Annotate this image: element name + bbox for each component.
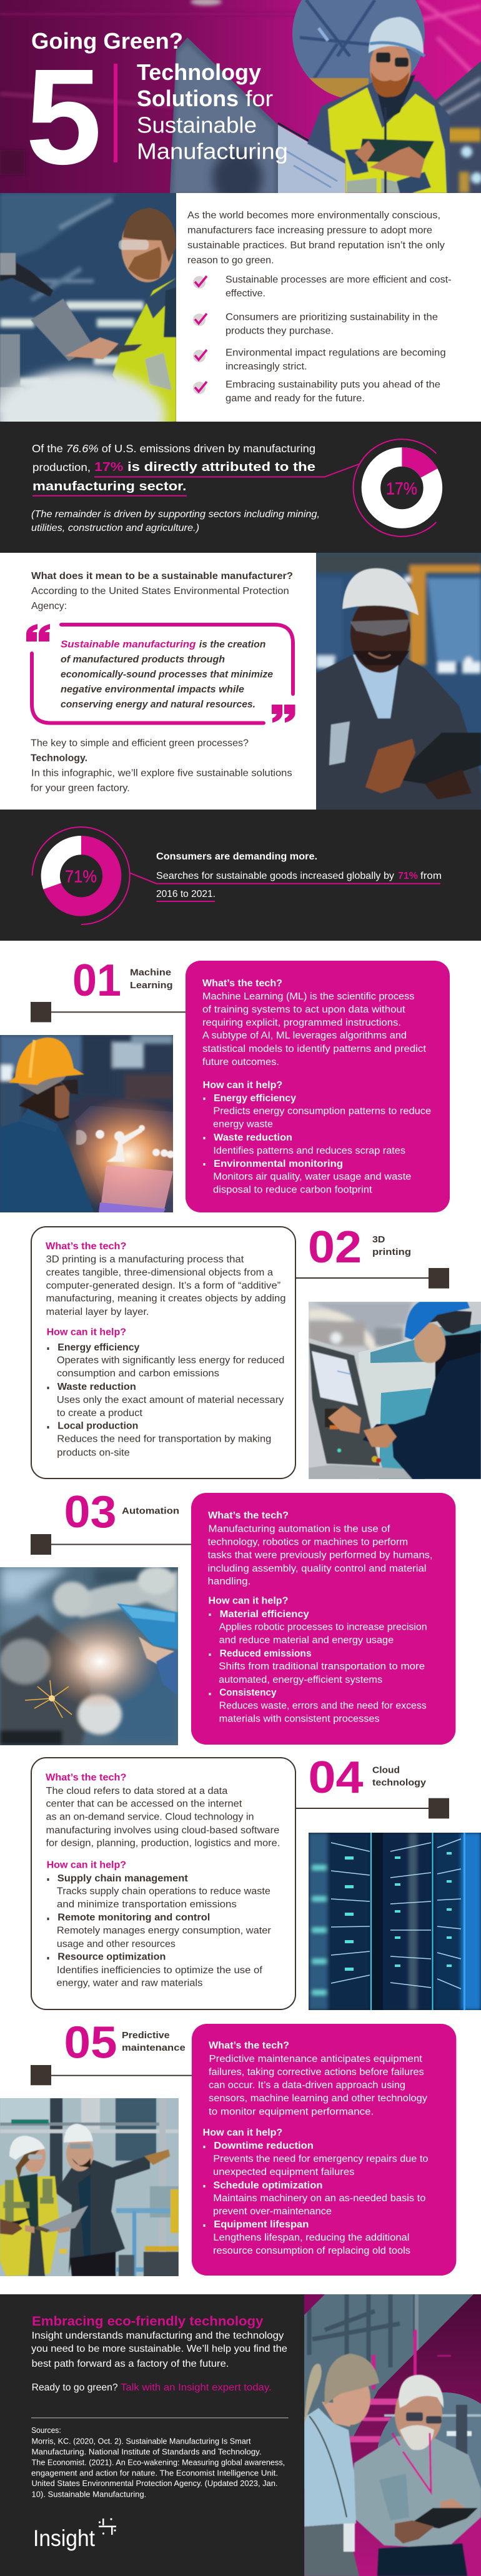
label: Predictive maintenance: maintenance	[122, 2043, 186, 2053]
panel: 3D printing description: Uses only the exact amount of material necessary	[57, 1395, 284, 1405]
panel: automation description: Shifts from traditional transportation to more	[219, 1662, 425, 1672]
call to action	[32, 2382, 272, 2393]
connector	[31, 2065, 192, 2085]
sources: engagement and action for nature. The Economist Intelligence Unit.	[31, 2469, 278, 2477]
definition closing text: In this infographic, we’ll explore five sustainable solutions	[31, 768, 292, 779]
grey factory wedge right	[432, 61, 481, 193]
section 04: cloud technology	[31, 1753, 481, 2010]
label: 3D printing: 3D	[372, 1234, 385, 1245]
heading: embracing eco-friendly technology: Embracing eco-friendly technology	[32, 2314, 264, 2329]
definition closing text: for your green factory.	[31, 783, 130, 794]
consumer text	[156, 851, 442, 899]
checklist item 3: increasingly strict.	[226, 361, 307, 372]
logo: Insight: Insight	[33, 2525, 96, 2551]
face	[369, 45, 412, 86]
panel: automation description: Consistency	[219, 1688, 277, 1698]
panel: cloud description: Tracks supply chain operations to reduce waste	[57, 1886, 270, 1896]
checklist item 3: Environmental impact regulations are becoming	[226, 347, 446, 358]
quote text: conserving energy and natural resources.	[61, 700, 255, 710]
panel: cloud description: The cloud refers to data stored at a data	[46, 1786, 228, 1796]
label: Machine Learning: Machine	[130, 967, 171, 978]
panel: predictive maintenance description: Lengthens lifespan, reducing the additional	[213, 2232, 409, 2243]
panel: machine learning description: Machine Learning (ML) is the scientific process	[202, 991, 415, 1002]
panel: predictive maintenance description: Equipment lifespan	[214, 2219, 309, 2230]
laptop	[31, 299, 142, 361]
panel: 3D printing description: Energy efficiency	[57, 1342, 140, 1353]
definition closing text: The key to simple and efficient green processes?	[31, 738, 249, 749]
label: Predictive maintenance: Predictive	[122, 2030, 170, 2041]
sources: The Economist. (2021). An Eco-wakening: Measuring global awareness,	[31, 2458, 285, 2467]
emissions text: manufacturing sector.	[32, 479, 187, 493]
panel: predictive maintenance description: Prevents the need for emergency repairs due to	[213, 2154, 428, 2164]
label: Machine Learning: Learning	[130, 980, 172, 991]
intro paragraph: reason to go green.	[187, 255, 274, 266]
callout line from donut	[130, 873, 440, 901]
panel: machine learning description: energy waste	[213, 1119, 273, 1130]
label: Machine Learning	[130, 967, 172, 991]
panel: 3D printing description: to create a product	[57, 1408, 143, 1419]
connector	[31, 1002, 186, 1022]
panel: automation description: Manufacturing automation is the use of	[209, 1524, 390, 1535]
panel: automation description: What’s the tech?	[208, 1510, 289, 1521]
panel: predictive maintenance description: Maintains machinery on an as-needed basis to	[213, 2193, 425, 2204]
checklist item 2	[193, 312, 438, 336]
definition closing text: Technology.	[31, 753, 87, 764]
panel: 3D printing description: How can it help?	[47, 1327, 126, 1338]
panel: automation description: Material efficiency	[220, 1609, 309, 1620]
panel: machine learning description: Identifies patterns and reduces scrap rates	[213, 1146, 405, 1156]
intro paragraph: As the world becomes more environmentally conscious,	[187, 210, 440, 221]
number 04: 04	[309, 1753, 364, 1803]
panel: predictive maintenance description	[192, 2024, 456, 2276]
photo: operator at control panel	[309, 1302, 481, 1479]
panel: cloud description: How can it help?	[47, 1860, 126, 1871]
panel: predictive maintenance description: prevent over-maintenance	[213, 2206, 332, 2217]
panel: intro text	[187, 210, 451, 404]
definition closing text	[31, 738, 292, 794]
panel: 3D printing description: What’s the tech?	[46, 1241, 126, 1252]
panel: 3D printing description: 3D printing is a manufacturing process that	[46, 1254, 244, 1265]
donut chart: 17%	[354, 439, 437, 537]
number 05: 05	[64, 2018, 117, 2068]
panel: 3D printing description: material layer by layer.	[46, 1307, 149, 1317]
label: Cloud technology	[372, 1765, 427, 1788]
panel: automation description: technology, robotics or machines to perform	[207, 1537, 408, 1547]
panel: emissions stat band	[0, 422, 481, 553]
heading: technology solutions: Sustainable	[137, 112, 257, 137]
panel: predictive maintenance description: failures, taking corrective actions before failures	[209, 2067, 424, 2078]
panel: automation description: and reduce material and energy usage	[219, 1635, 394, 1646]
panel: 3D printing description: computer-generated design. It’s a form of “additive”	[46, 1281, 280, 1291]
donut chart: 17%: 17%	[386, 479, 417, 498]
panel: cloud description: Supply chain management	[57, 1873, 188, 1884]
panel: machine learning description	[186, 961, 450, 1212]
helmet	[369, 17, 424, 56]
panel: predictive maintenance description: to monitor equipment performance.	[209, 2106, 374, 2117]
panel: machine learning description: What’s the tech?	[202, 978, 282, 989]
panel: 3D printing description: Reduces the need for transportation by making	[57, 1434, 271, 1445]
closing paragraph: you need to be more sustainable. We’ll help you find the	[31, 2344, 287, 2354]
icon: closing quote	[272, 705, 295, 723]
definition intro: Agency:	[31, 601, 67, 612]
photo: worker in white helmet with tablet	[316, 553, 481, 810]
consumer text: 2016 to 2021.	[156, 889, 216, 899]
panel: 3D printing description: Waste reduction	[57, 1382, 136, 1392]
sources: 10). Sustainable Manufacturing.	[31, 2490, 146, 2499]
connector	[295, 1798, 449, 1818]
photo: engineer with laptop and robot arm	[0, 193, 176, 422]
call to action: Talk with an Insight expert today.	[121, 2382, 272, 2393]
consumer text: 71%	[398, 871, 418, 881]
panel: predictive maintenance description: Downtime reduction	[214, 2141, 314, 2151]
panel: cloud description: manufacturing involves using cloud-based software	[46, 1825, 279, 1836]
panel: cloud description: Remote monitoring and control	[57, 1912, 210, 1923]
panel: 3D printing description: consumption and carbon emissions	[57, 1369, 219, 1379]
consumer text: Consumers are demanding more.	[156, 851, 317, 862]
panel: predictive maintenance description: Schedule optimization	[213, 2180, 322, 2191]
steel blue circle	[292, 0, 425, 97]
panel: machine learning description: Predicts energy consumption patterns to reduce	[213, 1106, 431, 1117]
emissions text: Of the 76.6% of U.S. emissions driven by manufacturing	[32, 442, 315, 455]
label: 3D printing	[372, 1234, 411, 1257]
icon: opening quote	[26, 624, 50, 642]
monitors	[170, 37, 278, 193]
definition intro: What does it mean to be a sustainable manufacturer?	[31, 571, 293, 582]
quote text: Sustainable manufacturing	[61, 640, 196, 650]
intro paragraph: sustainable practices. But brand reputation isn’t the only	[187, 240, 445, 251]
panel: closing footer	[0, 2294, 481, 2576]
panel: machine learning description: requiring explicit, programmed instructions.	[202, 1018, 401, 1028]
logo: Insight	[33, 2518, 116, 2551]
panel: predictive maintenance description: can occur. It’s a data-driven approach using	[209, 2080, 405, 2091]
number 03: 03	[64, 1487, 116, 1537]
panel: machine learning description: Waste reduction	[214, 1132, 292, 1143]
panel: predictive maintenance description: What’s the tech?	[209, 2040, 289, 2051]
heading: Going Green?: Going Green?	[31, 28, 183, 54]
quote text: negative environmental impacts while	[61, 685, 244, 695]
callout line to donut	[32, 464, 359, 496]
panel: 3D printing description	[31, 1227, 295, 1479]
panel: consumer demand stat band	[0, 810, 481, 941]
section 01: machine learning	[0, 956, 450, 1215]
photo: robotic arm, sparks and tablet	[0, 1567, 178, 1745]
sources: Morris, KC. (2020, Oct. 2). Sustainable Manufacturing Is Smart	[31, 2437, 251, 2446]
panel: cloud description: and minimize transportation emissions	[57, 1900, 237, 1910]
section 05: predictive maintenance	[0, 2018, 456, 2277]
closing paragraph: Insight understands manufacturing and the technology	[32, 2331, 284, 2341]
checklist item 4	[193, 380, 440, 404]
panel: predictive maintenance description: resource consumption of replacing old tools	[213, 2246, 410, 2256]
photo: helmet worker with holographic screen	[0, 1035, 173, 1212]
emissions text	[31, 442, 320, 533]
panel: predictive maintenance description: How can it help?	[203, 2128, 282, 2138]
definition intro	[31, 571, 293, 612]
panel: machine learning description: Monitors air quality, water usage and waste	[213, 1172, 411, 1182]
number 01: 01	[72, 956, 121, 1006]
quote text: is the creation	[199, 640, 266, 650]
panel: machine learning description: of training systems to act upon data without	[202, 1004, 405, 1015]
operator	[362, 1330, 481, 1479]
panel: cloud description: for design, planning, production, logistics and more.	[46, 1838, 280, 1849]
engineer	[112, 278, 176, 425]
heading: technology solutions: for	[245, 86, 273, 111]
panel: cloud description: center that can be accessed on the internet	[46, 1798, 242, 1809]
consumer text: Searches for sustainable goods increased globally by	[156, 871, 394, 881]
emissions text: is directly attributed to the	[127, 460, 315, 474]
photo: two engineers with tablet	[304, 2294, 481, 2576]
panel: machine learning description: How can it help?	[203, 1080, 282, 1091]
panel: automation description: How can it help?	[209, 1595, 289, 1607]
consumer text: from	[420, 871, 442, 881]
connector	[31, 1534, 191, 1555]
emissions text: 17%	[94, 460, 123, 474]
label: Cloud technology: Cloud	[372, 1765, 400, 1775]
panel: 3D printing description: manufacturing, meaning it creates objects by adding	[46, 1294, 286, 1304]
quote text	[61, 640, 273, 710]
quote text: economically-sound processes that minimize	[61, 670, 273, 680]
panel: automation description: Reduced emissions	[220, 1648, 312, 1659]
panel: definition text	[26, 571, 295, 794]
laptop and tablet	[34, 2206, 88, 2232]
panel: automation description: handling.	[207, 1577, 250, 1587]
panel: automation description	[191, 1493, 455, 1745]
arms/tablet	[345, 149, 369, 175]
panel: machine learning description: A subtype of AI, ML leverages algorithms and	[202, 1031, 407, 1041]
intro paragraph: manufacturers face increasing pressure to adopt more	[187, 225, 432, 236]
heading: technology solutions: Technology	[137, 59, 261, 85]
panel: predictive maintenance description: unexpected equipment failures	[213, 2167, 355, 2177]
sources: United States Environmental Protection Agency. (Updated 2023, Jan.	[31, 2479, 277, 2488]
panel: machine learning description: statistical models to identify patterns and predict	[202, 1044, 427, 1054]
heading: technology solutions: Solutions	[137, 86, 239, 111]
big number 5: 5	[26, 41, 102, 193]
donut chart: 71%: 71%	[65, 867, 97, 886]
panel: automation description: automated, energy-efficient systems	[219, 1675, 382, 1685]
closing paragraph: best path forward as a factory of the future.	[32, 2359, 229, 2369]
worker body	[307, 17, 450, 193]
photo: hero worker with tablet over magenta factory	[0, 0, 481, 206]
emissions text: (The remainder is driven by supporting sectors including mining,	[31, 509, 320, 520]
panel: automation description: Applies robotic processes to increase precision	[219, 1622, 427, 1632]
heading: technology solutions: Manufacturing	[137, 139, 288, 164]
panel: predictive maintenance description: sensors, machine learning and other technology	[209, 2093, 427, 2104]
title block	[26, 28, 288, 193]
donut chart: 71%	[32, 827, 130, 924]
checklist item 2: products they purchase.	[226, 325, 334, 336]
heading: technology solutions	[137, 59, 288, 164]
quote frame	[32, 625, 293, 723]
panel: automation description: materials with consistent processes	[219, 1713, 380, 1724]
checklist item 4: game and ready for the future.	[226, 394, 365, 404]
panel: cloud description: What’s the tech?	[46, 1773, 126, 1783]
panel: machine learning description: future outcomes.	[202, 1057, 279, 1068]
panel: automation description: tasks that were previously performed by humans,	[207, 1550, 432, 1561]
checklist item 1	[193, 275, 451, 299]
connector	[295, 1268, 449, 1289]
call to action: Ready to go green?	[32, 2382, 118, 2393]
label: 3D printing: printing	[372, 1247, 411, 1257]
sources: Manufacturing. National Institute of Standards and Technology.	[31, 2447, 262, 2456]
quote text: of manufactured products through	[61, 655, 225, 665]
panel: automation description: including assembly, quality control and material	[207, 1563, 426, 1574]
label: Predictive maintenance	[122, 2030, 186, 2053]
panel: 3D printing description: products on-site	[57, 1447, 130, 1458]
panel: machine learning description: Energy efficiency	[214, 1093, 296, 1104]
man	[350, 2436, 481, 2549]
woman	[304, 2408, 356, 2527]
checklist item 1: effective.	[226, 288, 265, 299]
emissions text: production,	[32, 461, 91, 473]
panel: cloud description	[31, 1758, 295, 2009]
robot arm	[0, 262, 54, 297]
panel: predictive maintenance description: Predictive maintenance anticipates equipment	[209, 2054, 423, 2064]
panel: cloud description: Identifies inefficiencies to optimize the use of	[57, 1965, 263, 1976]
panel: 3D printing description: Local production	[57, 1421, 138, 1432]
definition intro: According to the United States Environmental Protection	[31, 586, 289, 597]
photo: data center server racks	[309, 1833, 481, 2010]
panel: 3D printing description: Operates with significantly less energy for reduced	[57, 1355, 284, 1366]
panel: cloud description: energy, water and raw materials	[56, 1978, 203, 1988]
label: Automation: Automation	[122, 1505, 179, 1516]
panel: machine learning description: Environmental monitoring	[214, 1159, 343, 1169]
photo: engineers pointing in factory	[0, 2098, 179, 2277]
checklist item 3	[193, 347, 446, 372]
panel: cloud description: usage and other resources	[57, 1939, 176, 1949]
panel: automation description: Reduces waste, errors and the need for excess	[219, 1701, 427, 1712]
checklist item 4: Embracing sustainability puts you ahead of the	[226, 380, 440, 390]
label: Cloud technology: technology	[372, 1778, 427, 1788]
number 02: 02	[308, 1222, 362, 1272]
intro paragraph	[187, 210, 445, 266]
sources: Sources:	[31, 2426, 61, 2435]
section 03: automation	[0, 1487, 455, 1745]
section 02: 3D printing	[31, 1222, 481, 1479]
panel: machine learning description: disposal to reduce carbon footprint	[213, 1185, 372, 1196]
title divider	[114, 64, 117, 162]
panel: 3D printing description: creates tangible, three-dimensional objects from a	[46, 1267, 273, 1278]
emissions text: utilities, construction and agriculture.)	[31, 523, 199, 533]
sources	[31, 2426, 285, 2499]
woman	[0, 2176, 59, 2276]
panel: cloud description: as an on-demand service. Cloud technology in	[46, 1812, 254, 1823]
checklist item 2: Consumers are prioritizing sustainability in the	[226, 312, 438, 323]
man	[55, 2155, 150, 2274]
panel: cloud description: Remotely manages energy consumption, water	[57, 1926, 271, 1936]
checklist item 1: Sustainable processes are more efficient and cost-	[226, 275, 451, 285]
panel: cloud description: Resource optimization	[57, 1951, 166, 1963]
closing paragraph	[31, 2331, 287, 2369]
